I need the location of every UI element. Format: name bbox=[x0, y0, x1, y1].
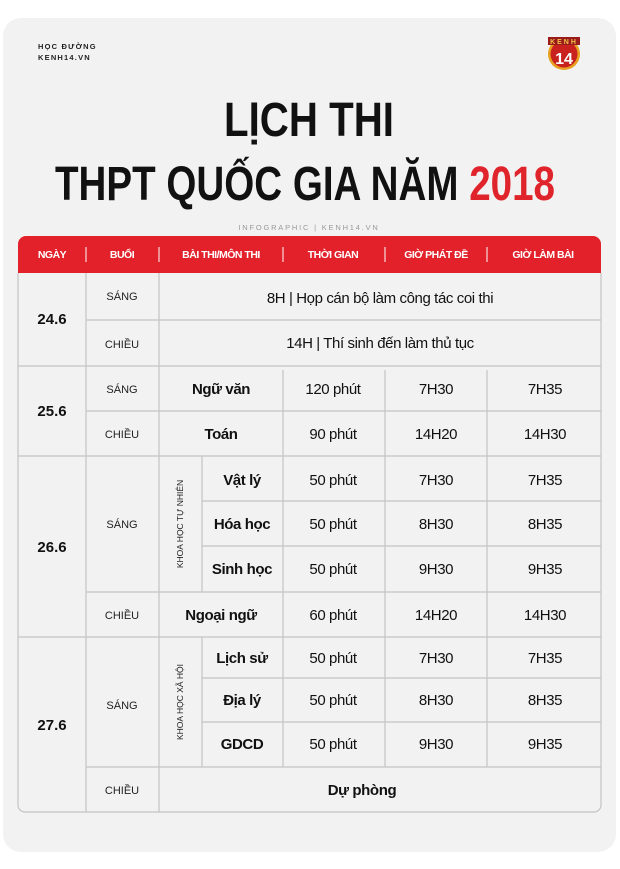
table content: 14H30 bbox=[524, 607, 566, 624]
table content: 7H35 bbox=[528, 650, 562, 667]
table header: BUỔI bbox=[110, 248, 135, 261]
table content: Hóa học bbox=[214, 516, 270, 533]
table content: GDCD bbox=[221, 736, 264, 753]
table header: BÀI THI/MÔN THI bbox=[182, 248, 260, 261]
icon: kenh14 logo: KENH bbox=[550, 39, 578, 46]
table content: 60 phút bbox=[309, 607, 358, 624]
icon: kenh14 logo: 14 bbox=[555, 51, 573, 68]
table content: 50 phút bbox=[309, 650, 358, 667]
sessions: SÁNG bbox=[106, 699, 138, 712]
group labels: KHOA HỌC XÃ HỘI bbox=[175, 664, 185, 740]
table content: 14H20 bbox=[415, 426, 457, 443]
table content: Vật lý bbox=[223, 472, 262, 489]
dates: 26.6 bbox=[37, 539, 67, 556]
table content: 50 phút bbox=[309, 561, 358, 578]
table header: GIỜ LÀM BÀI bbox=[512, 248, 574, 261]
table content: 50 phút bbox=[309, 692, 358, 709]
table header: GIỜ PHÁT ĐỀ bbox=[404, 248, 468, 261]
sessions: SÁNG bbox=[106, 518, 138, 531]
table content: Ngữ văn bbox=[192, 381, 250, 398]
brand text: HỌC ĐƯỜNG bbox=[38, 42, 97, 51]
dates: 27.6 bbox=[37, 717, 67, 734]
table content: Lịch sử bbox=[216, 650, 268, 667]
table header: THỜI GIAN bbox=[308, 248, 358, 261]
group labels bbox=[175, 480, 185, 740]
table body grid bbox=[18, 273, 601, 812]
sessions: CHIỀU bbox=[105, 784, 139, 797]
table content: 7H30 bbox=[419, 381, 453, 398]
sessions: CHIỀU bbox=[105, 428, 139, 441]
table content: Ngoại ngữ bbox=[185, 607, 257, 624]
table header: NGÀY bbox=[38, 248, 67, 261]
table content bbox=[185, 290, 566, 799]
icon: kenh14 logo bbox=[548, 37, 580, 70]
table content: 8H | Họp cán bộ làm công tác coi thi bbox=[267, 290, 493, 307]
dates: 25.6 bbox=[37, 403, 67, 420]
table content: 8H30 bbox=[419, 692, 453, 709]
dates bbox=[37, 311, 67, 734]
table content: Dự phòng bbox=[328, 782, 396, 799]
table content: 7H35 bbox=[528, 472, 562, 489]
sessions: CHIỀU bbox=[105, 338, 139, 351]
table content: 9H30 bbox=[419, 561, 453, 578]
subtitle: INFOGRAPHIC | KENH14.VN bbox=[238, 223, 380, 232]
sessions bbox=[105, 290, 139, 797]
table content: 90 phút bbox=[309, 426, 358, 443]
table content: 14H30 bbox=[524, 426, 566, 443]
sessions: SÁNG bbox=[106, 383, 138, 396]
title: THPT QUỐC GIA NĂM 2018 bbox=[55, 156, 555, 211]
table content: 7H30 bbox=[419, 650, 453, 667]
table header bbox=[18, 236, 601, 273]
table content: 8H35 bbox=[528, 516, 562, 533]
sessions: SÁNG bbox=[106, 290, 138, 303]
dates: 24.6 bbox=[37, 311, 67, 328]
table content: 50 phút bbox=[309, 736, 358, 753]
group labels: KHOA HỌC TỰ NHIÊN bbox=[175, 480, 185, 568]
title: LỊCH THI bbox=[224, 94, 394, 147]
brand text bbox=[38, 42, 97, 62]
table content: Địa lý bbox=[223, 692, 262, 709]
table content: 8H35 bbox=[528, 692, 562, 709]
table content: Sinh học bbox=[212, 561, 272, 578]
table content: 14H | Thí sinh đến làm thủ tục bbox=[286, 335, 475, 352]
table content: 120 phút bbox=[305, 381, 362, 398]
table content: Toán bbox=[204, 426, 238, 443]
brand text: KENH14.VN bbox=[38, 53, 91, 62]
table content: 7H30 bbox=[419, 472, 453, 489]
table content: 9H35 bbox=[528, 736, 562, 753]
table content: 50 phút bbox=[309, 516, 358, 533]
table content: 8H30 bbox=[419, 516, 453, 533]
table content: 14H20 bbox=[415, 607, 457, 624]
table content: 50 phút bbox=[309, 472, 358, 489]
table content: 7H35 bbox=[528, 381, 562, 398]
table content: 9H30 bbox=[419, 736, 453, 753]
title bbox=[55, 94, 555, 211]
sessions: CHIỀU bbox=[105, 609, 139, 622]
table content: 9H35 bbox=[528, 561, 562, 578]
